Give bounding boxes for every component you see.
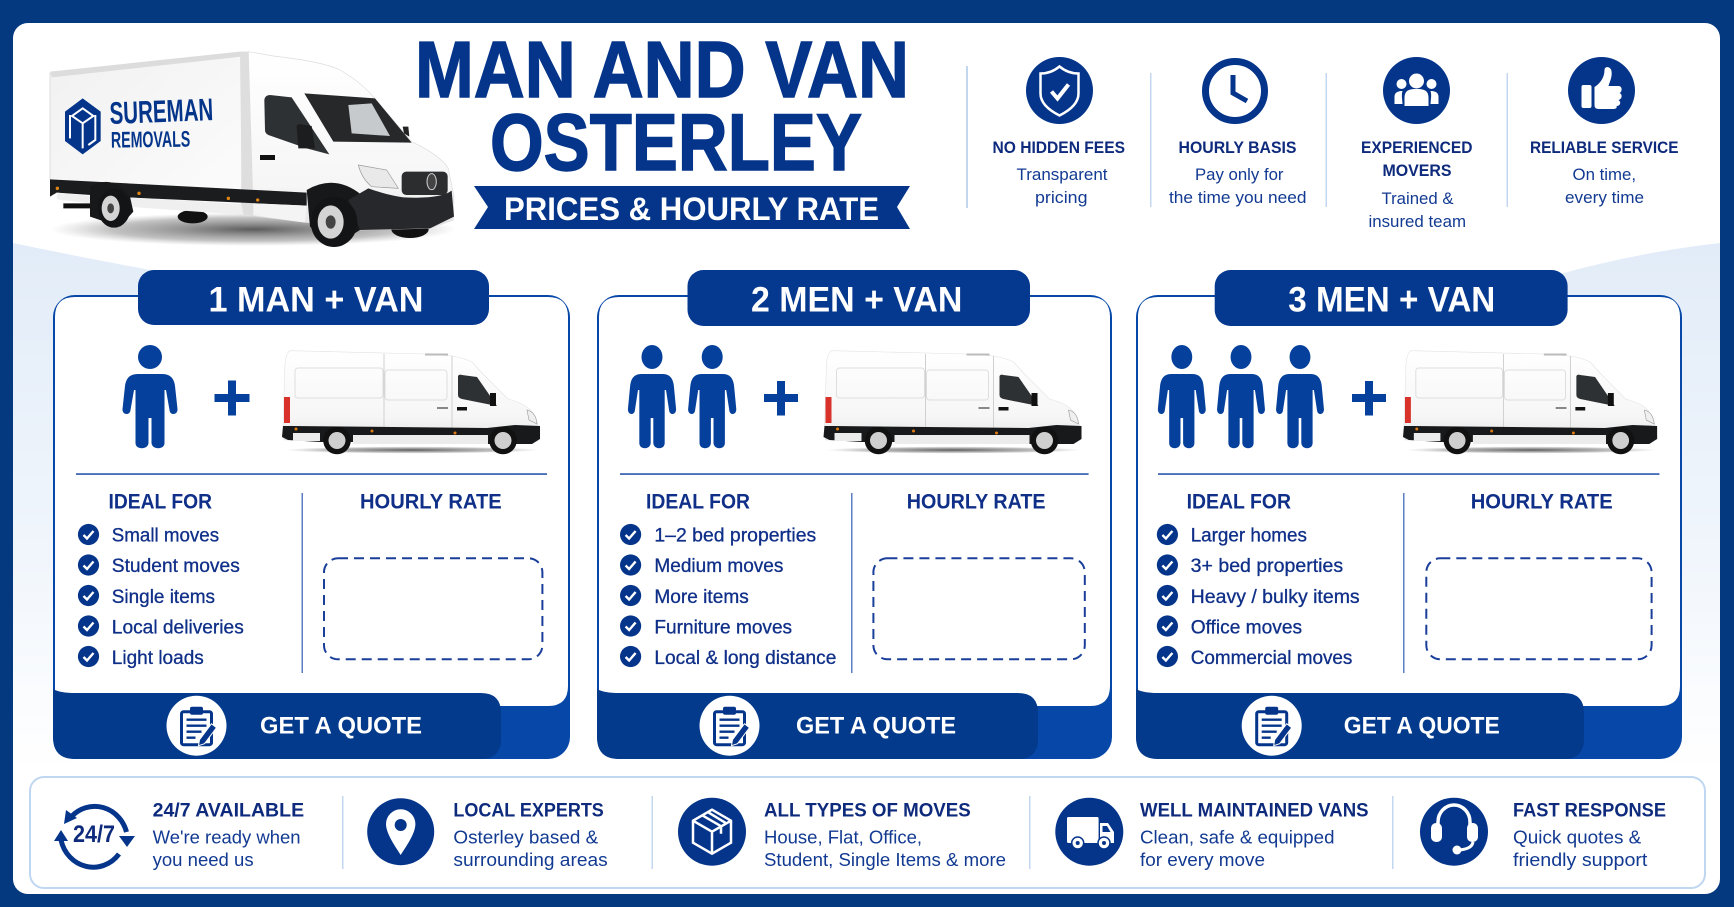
hourly rate placeholder box <box>324 558 542 659</box>
illustration: white van <box>1403 351 1657 454</box>
logo: Sureman Removals: SUREMAN <box>109 92 214 131</box>
logo: Sureman Removals <box>65 92 214 154</box>
top feature: experienced movers <box>1326 57 1472 231</box>
benefit: 24/7 available: you need us <box>153 850 254 870</box>
benefit: 24/7 available: We're ready when <box>153 827 301 847</box>
ideal for list: Single items <box>112 587 215 608</box>
benefit: all types of moves: House, Flat, Office, <box>764 827 922 847</box>
card heading: 2 MEN + VAN <box>751 281 962 320</box>
top feature: hourly basis: Pay only for <box>1195 165 1284 184</box>
benefit: 24/7 available: 24/7 AVAILABLE <box>153 800 304 822</box>
ideal for list: Medium moves <box>654 556 783 577</box>
top feature: no hidden fees: Transparent <box>1016 165 1108 184</box>
benefit: well maintained vans <box>1055 798 1369 870</box>
ideal for list: 1–2 bed properties <box>654 526 816 546</box>
ideal for list: IDEAL FOR <box>108 490 212 513</box>
subtitle banner: PRICES & HOURLY RATE <box>504 191 879 227</box>
icon: two people <box>628 345 736 448</box>
ideal for list: More items <box>654 587 749 608</box>
ideal for list: Local & long distance <box>654 648 836 669</box>
top feature: experienced movers: insured team <box>1368 212 1466 231</box>
card heading: 3 MEN + VAN <box>1288 281 1495 320</box>
benefit: local experts <box>367 798 608 870</box>
quote icon <box>700 696 760 756</box>
icon: plus <box>1352 381 1386 416</box>
title: MAN AND VAN <box>415 25 909 114</box>
top feature: no hidden fees: NO HIDDEN FEES <box>992 138 1125 157</box>
benefit: local experts: Osterley based & <box>453 827 598 847</box>
light blue background right wedge <box>1560 243 1720 770</box>
illustration: white van <box>282 351 540 454</box>
ideal for list: Office moves <box>1191 618 1302 638</box>
benefit: well maintained vans: for every move <box>1140 850 1265 870</box>
benefit: all types of moves <box>678 798 1006 870</box>
hourly rate heading: HOURLY RATE <box>1471 490 1613 513</box>
top feature: hourly basis: HOURLY BASIS <box>1178 138 1296 157</box>
quote icon <box>1242 696 1302 756</box>
panel: 3 men + van <box>1136 270 1682 759</box>
benefit: all types of moves: ALL TYPES OF MOVES <box>764 800 971 822</box>
ideal for list: Small moves <box>112 526 219 546</box>
top feature: experienced movers: Trained & <box>1382 189 1454 208</box>
top feature: reliable service: On time, <box>1572 165 1636 184</box>
ideal for list: Commercial moves <box>1191 648 1352 669</box>
ideal for list <box>78 490 244 669</box>
get a quote label: GET A QUOTE <box>796 712 956 739</box>
ideal for list: Furniture moves <box>654 618 792 638</box>
benefit: 24/7 available: 24/7 <box>73 821 115 848</box>
ideal for list: Local deliveries <box>112 618 244 638</box>
hourly rate heading: HOURLY RATE <box>907 490 1046 513</box>
top feature: hourly basis: the time you need <box>1169 188 1306 207</box>
illustration: branded removal truck <box>50 52 457 247</box>
icon: plus <box>764 381 798 416</box>
bottom benefits strip <box>30 777 1705 888</box>
get a quote label: GET A QUOTE <box>260 712 422 739</box>
icon: three people <box>1158 345 1324 448</box>
icon: one person <box>122 345 178 448</box>
benefit: well maintained vans: Clean, safe & equipped <box>1140 827 1334 847</box>
ideal for list: Larger homes <box>1191 526 1307 546</box>
hourly rate heading: HOURLY RATE <box>360 490 502 513</box>
top feature: experienced movers: EXPERIENCED <box>1361 138 1472 157</box>
title: OSTERLEY <box>490 98 862 188</box>
benefit: fast response: friendly support <box>1513 850 1647 870</box>
ideal for list <box>1157 490 1360 669</box>
benefit: local experts: LOCAL EXPERTS <box>453 800 604 822</box>
benefit: local experts: surrounding areas <box>453 850 608 870</box>
ideal for list: 3+ bed properties <box>1191 556 1343 577</box>
icon: plus <box>214 380 250 416</box>
top feature: no hidden fees <box>966 57 1125 208</box>
benefit: 24/7 available <box>54 800 304 870</box>
ideal for list: IDEAL FOR <box>646 490 750 513</box>
illustration: white van <box>824 351 1082 454</box>
benefit: fast response: FAST RESPONSE <box>1513 800 1666 822</box>
panel: 2 men + van <box>597 270 1112 759</box>
ideal for list: Light loads <box>112 648 204 669</box>
card heading: 1 MAN + VAN <box>208 281 424 320</box>
top feature: no hidden fees: pricing <box>1035 188 1088 207</box>
top feature: reliable service <box>1506 57 1678 207</box>
hourly rate placeholder box <box>1426 558 1652 659</box>
benefit: fast response <box>1420 798 1666 870</box>
logo: Sureman Removals: REMOVALS <box>111 126 190 153</box>
top feature: reliable service: RELIABLE SERVICE <box>1530 138 1678 157</box>
top feature: hourly basis <box>1150 62 1306 207</box>
ideal for list: Heavy / bulky items <box>1191 587 1360 608</box>
ideal for list: IDEAL FOR <box>1187 490 1291 513</box>
benefit: well maintained vans: WELL MAINTAINED VANS <box>1140 800 1369 822</box>
benefit: all types of moves: Student, Single Items & more <box>764 850 1006 870</box>
light blue background left wedge <box>13 243 150 770</box>
get a quote label: GET A QUOTE <box>1344 712 1500 739</box>
lower black stripe <box>50 179 307 206</box>
panel: 1 man + van <box>53 270 570 759</box>
top feature: reliable service: every time <box>1565 188 1644 207</box>
front bumper <box>348 188 454 230</box>
title <box>415 25 909 188</box>
benefit: fast response: Quick quotes & <box>1513 827 1641 847</box>
top feature: experienced movers: MOVERS <box>1382 161 1452 180</box>
ideal for list <box>620 490 836 669</box>
hourly rate placeholder box <box>873 558 1085 659</box>
ideal for list: Student moves <box>112 556 240 577</box>
quote icon <box>166 696 226 756</box>
